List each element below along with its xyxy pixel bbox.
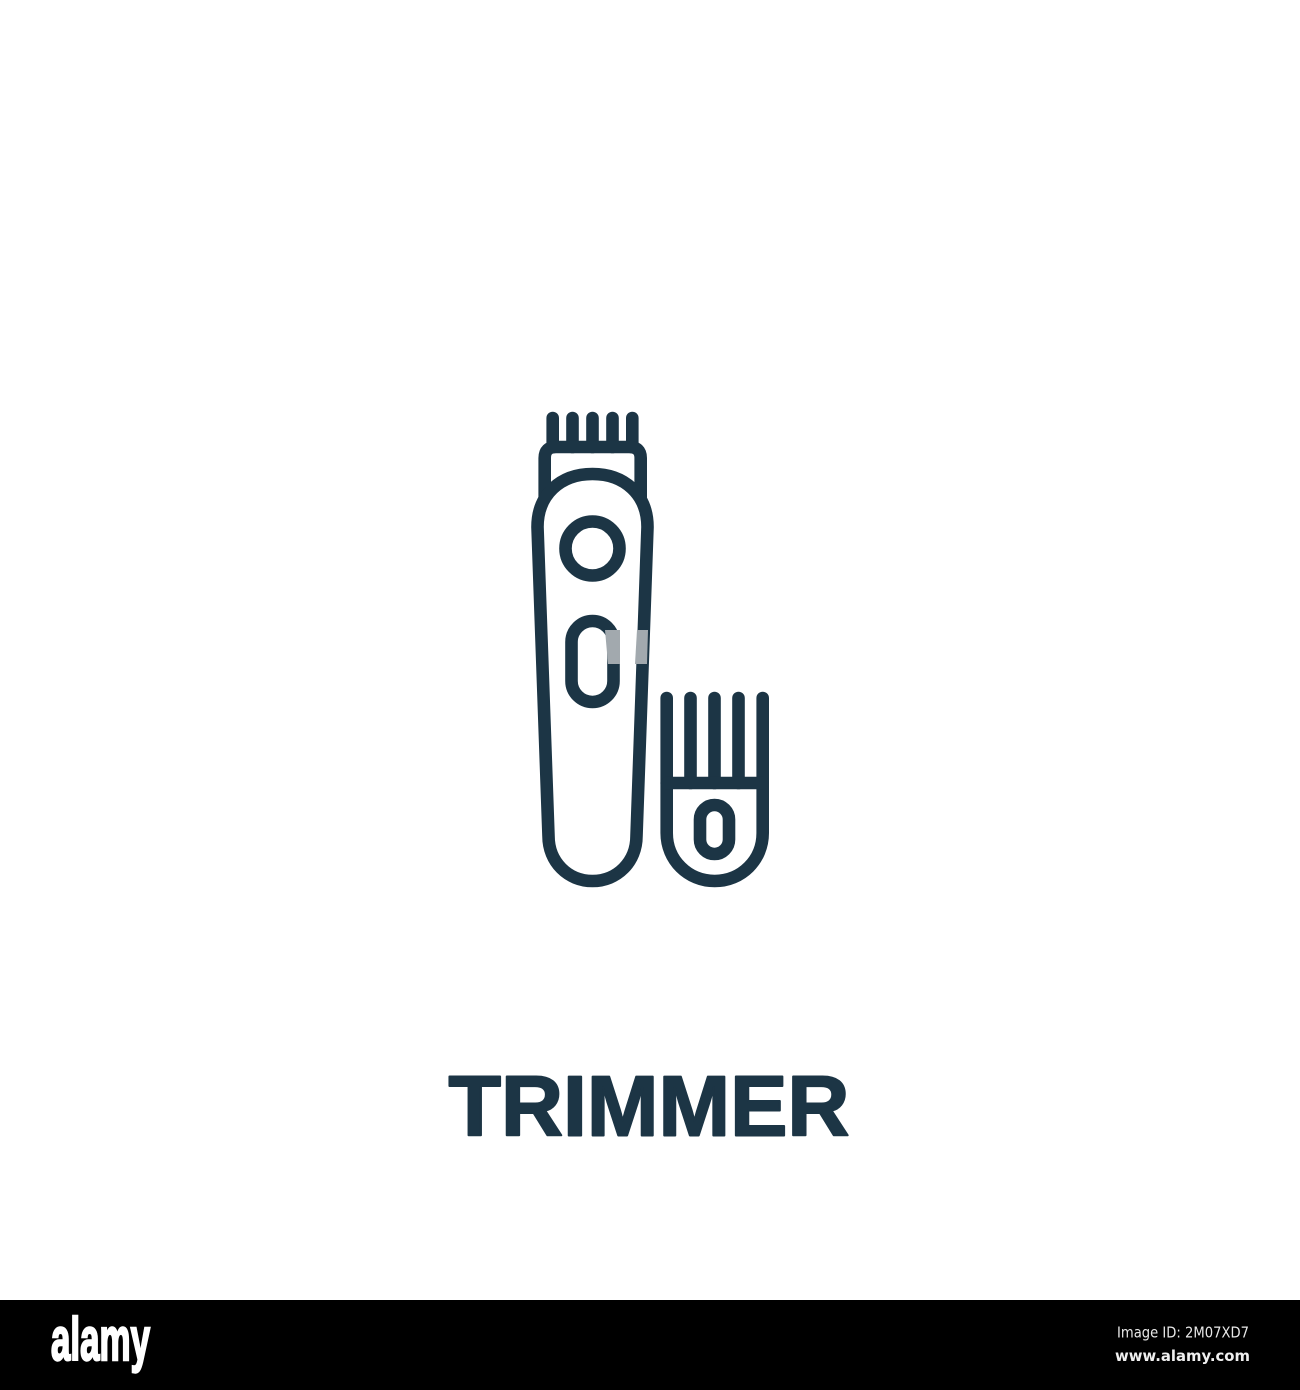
guard crossbar	[667, 777, 763, 789]
guard outline	[667, 698, 763, 881]
footer bar	[0, 1300, 1300, 1390]
trimmer handle	[538, 474, 648, 881]
watermark fragment over the trimmer	[605, 630, 648, 664]
guard slot	[700, 805, 729, 854]
slider switch	[572, 621, 614, 702]
icon: comb guard attachment	[667, 698, 763, 881]
blade teeth	[553, 418, 632, 447]
logo: alamy: alamy	[51, 1306, 150, 1373]
trimmer head	[545, 447, 641, 497]
image id: Image ID: 2M07XD7	[1117, 1324, 1249, 1342]
website: www.alamy.com	[1115, 1347, 1250, 1365]
power button	[566, 522, 620, 576]
icon: trimmer body with head and blade teeth	[538, 418, 648, 881]
guard teeth	[690, 698, 738, 783]
title: TRIMMER	[448, 1060, 850, 1154]
